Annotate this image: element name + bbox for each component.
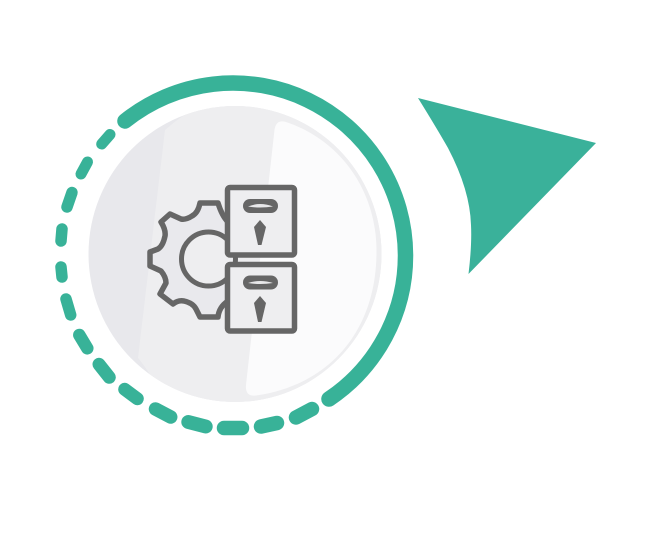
arrow: teal pointer triangle (418, 98, 596, 274)
disk highlight panel (246, 121, 377, 396)
icon: lower box (228, 264, 294, 331)
icon: gear with two boxes (150, 188, 294, 331)
progress ring: solid arc and dashed remainder (61, 83, 406, 428)
solid progress arc (125, 83, 406, 399)
disk base (88, 115, 184, 374)
dashed remaining track (61, 134, 312, 428)
icon: upper box (228, 188, 294, 255)
infographic canvas (55, 75, 596, 436)
grey disk background (88, 105, 390, 405)
icon: gear (150, 203, 236, 317)
disk middle band (138, 105, 390, 405)
